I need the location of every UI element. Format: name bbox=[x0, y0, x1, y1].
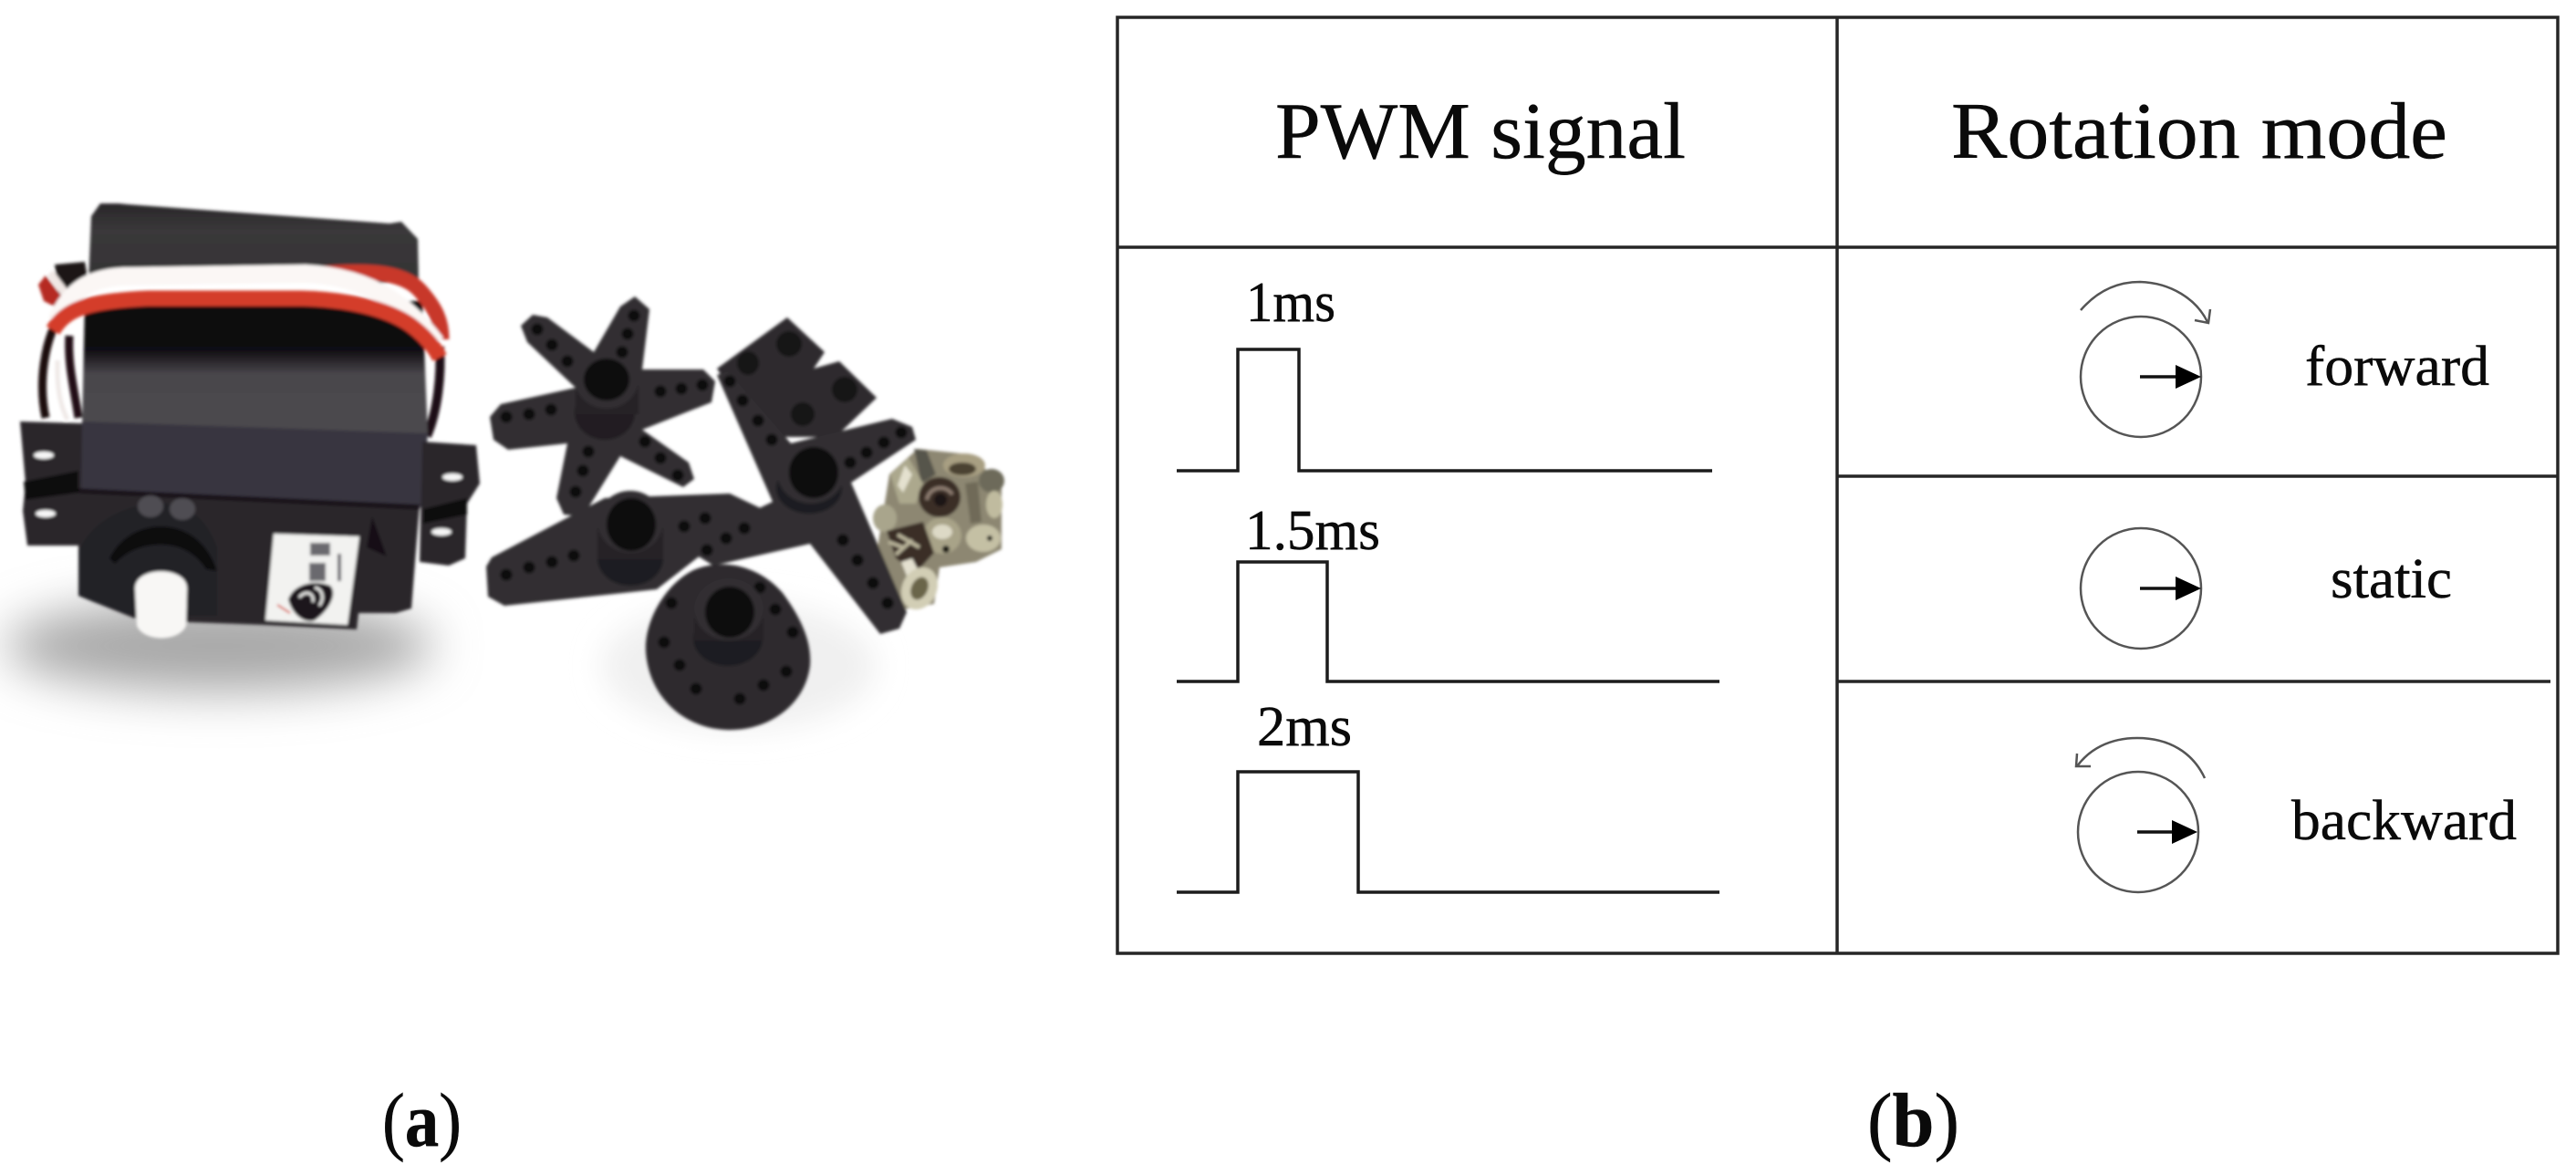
mounting block bbox=[717, 317, 877, 437]
double arm horn bbox=[486, 491, 766, 606]
signal 2ms: 2ms bbox=[1257, 696, 1352, 758]
shadow under horns bbox=[602, 602, 876, 730]
servo label sticker bbox=[265, 534, 359, 625]
shadow under servo bbox=[5, 600, 433, 691]
left wire loop bbox=[43, 315, 78, 420]
right mounting ear bbox=[420, 442, 480, 566]
wire bundle bbox=[53, 272, 441, 358]
signal 1.5ms: 1.5ms bbox=[1245, 500, 1380, 562]
servo main body bbox=[82, 301, 428, 436]
wire connector bbox=[55, 262, 88, 310]
caption: (b): (b) bbox=[1867, 1078, 1959, 1163]
servo horns and screws bbox=[486, 296, 1004, 730]
left mounting ear bbox=[20, 421, 82, 546]
right wire loop bbox=[427, 347, 440, 436]
servo middle band bbox=[78, 421, 428, 507]
signal 1.5ms bbox=[1177, 500, 1719, 681]
metal screws bbox=[873, 449, 1004, 616]
table grid bbox=[1117, 17, 2558, 953]
sticker logo bbox=[277, 583, 333, 621]
disc hub bbox=[694, 578, 763, 640]
sticker print bbox=[309, 543, 341, 581]
mounting holes bbox=[34, 452, 462, 536]
label side notch bbox=[367, 516, 387, 556]
caption: (a): (a) bbox=[382, 1078, 462, 1163]
signal 2ms bbox=[1177, 696, 1719, 892]
star horn bbox=[490, 296, 715, 516]
front edge shadow line bbox=[78, 491, 420, 507]
round disc horn bbox=[646, 565, 810, 730]
panel b: PWM rotation table bbox=[1117, 17, 2558, 953]
gear collar bbox=[78, 495, 217, 616]
servo front body bbox=[78, 489, 420, 629]
servo rear cover bbox=[88, 203, 419, 283]
label: forward: forward bbox=[2305, 336, 2489, 398]
icon: backward dial bbox=[2076, 738, 2205, 892]
metal screws backing bbox=[878, 449, 1002, 609]
heading: Rotation mode: Rotation mode bbox=[1951, 88, 2447, 176]
white output shaft bbox=[135, 571, 187, 639]
servo motor bbox=[20, 203, 480, 639]
label: static: static bbox=[2331, 548, 2452, 610]
signal 1ms bbox=[1177, 272, 1712, 471]
icon: static dial bbox=[2081, 528, 2201, 649]
static rotation mode bbox=[2081, 528, 2452, 649]
label: backward: backward bbox=[2291, 790, 2517, 852]
forward rotation mode bbox=[2081, 282, 2489, 437]
cross horn bbox=[694, 371, 916, 634]
signal 1ms: 1ms bbox=[1246, 272, 1335, 334]
icon: forward dial bbox=[2081, 282, 2210, 437]
panel a: servo motor photo bbox=[5, 203, 1004, 730]
heading: PWM signal: PWM signal bbox=[1275, 88, 1686, 176]
backward rotation mode bbox=[2076, 738, 2517, 892]
